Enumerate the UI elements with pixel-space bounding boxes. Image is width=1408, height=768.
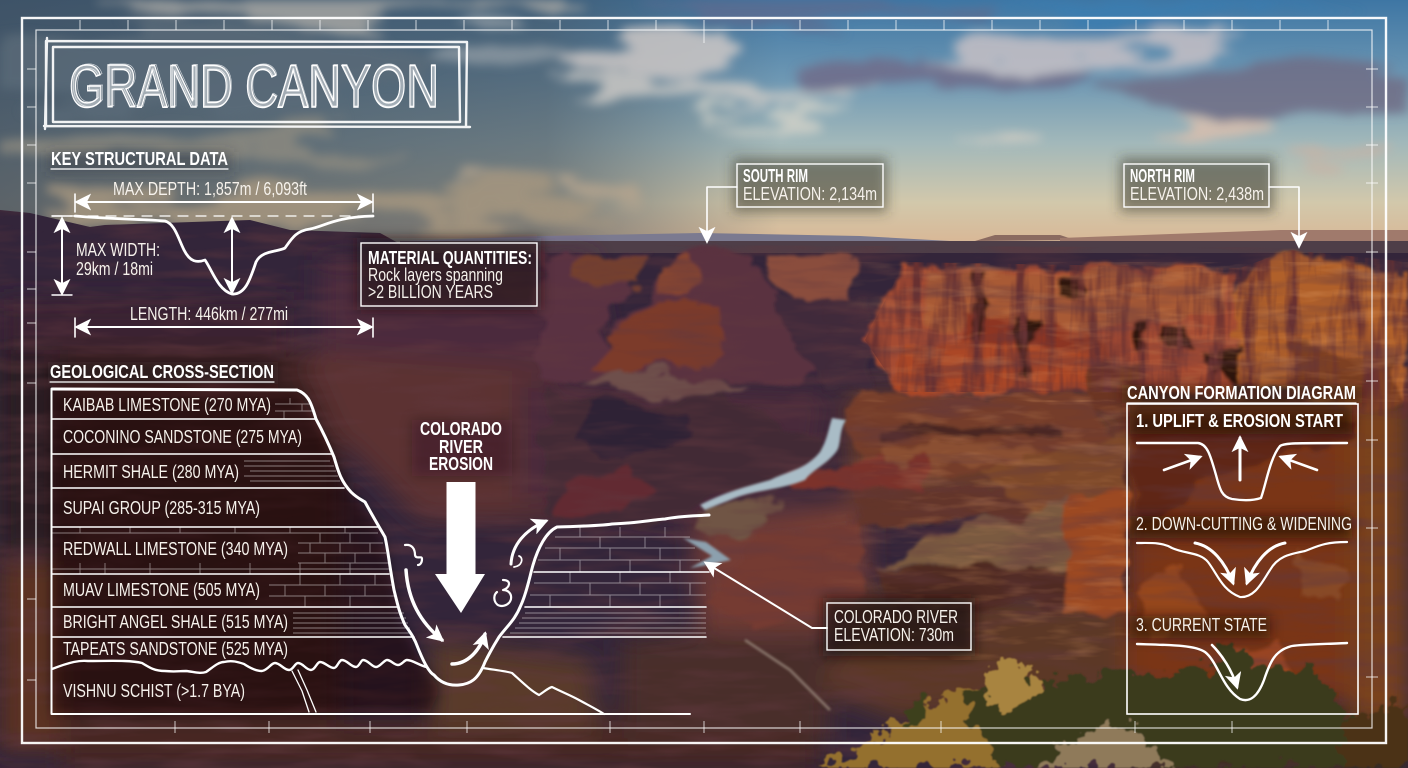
callout: material quantities: >2 BILLION YEARS (368, 282, 493, 302)
heading: geological cross-section: GEOLOGICAL CROSS-SECTION (50, 362, 274, 382)
stage 2: down-cutting and widening (1136, 514, 1352, 597)
strata labels: COCONINO SANDSTONE (275 MYA) (63, 427, 302, 447)
callout: south rim (707, 164, 883, 241)
strata labels: REDWALL LIMESTONE (340 MYA) (63, 539, 288, 559)
stage 1: uplift and erosion start (1136, 411, 1347, 500)
panel: geological cross-section (50, 362, 709, 714)
title sketch box (44, 38, 470, 129)
callout: colorado river elevation: ELEVATION: 730m (834, 625, 954, 645)
callout: north rim: NORTH RIM (1130, 166, 1195, 186)
title: Grand Canyon: GRAND CANYON (71, 52, 439, 119)
dark backing: halos behind labels and boxes (48, 152, 1362, 712)
strata outline and canyon profile (52, 389, 709, 714)
strata labels: VISHNU SCHIST (>1.7 BYA) (63, 681, 245, 701)
callout: colorado river elevation (706, 563, 971, 650)
strata labels: MUAV LIMESTONE (505 MYA) (63, 580, 260, 600)
arrows: erosion swirls (405, 521, 546, 664)
arrow: main downward erosion (435, 482, 485, 613)
callout: north rim: ELEVATION: 2,438m (1130, 184, 1264, 204)
callout: south rim: SOUTH RIM (743, 166, 808, 186)
panel: key structural data (51, 149, 373, 337)
label: colorado river erosion (420, 419, 502, 474)
canyon profile diagram with dimensions: MAX DEPTH: 1,857m / 6,093ft (113, 179, 307, 199)
stage 3: current state (1136, 615, 1347, 700)
label: colorado river erosion: EROSION (429, 454, 493, 474)
canyon profile diagram with dimensions (52, 179, 373, 337)
stage 2: down-cutting and widening: 2. DOWN-CUTTING & WIDENING (1136, 514, 1352, 534)
panel: canyon formation diagram (1127, 383, 1358, 714)
strata labels: SUPAI GROUP (285-315 MYA) (63, 498, 260, 518)
strata labels: TAPEATS SANDSTONE (525 MYA) (63, 639, 288, 659)
stage 1: uplift and erosion start: 1. UPLIFT & EROSION START (1136, 411, 1343, 431)
canyon profile diagram with dimensions: MAX WIDTH: (76, 240, 160, 260)
strata labels: KAIBAB LIMESTONE (270 MYA) (63, 395, 271, 415)
callout: material quantities (361, 243, 537, 306)
callout: material quantities: Rock layers spanning (368, 265, 503, 285)
callout: south rim: ELEVATION: 2,134m (743, 184, 877, 204)
canyon profile diagram with dimensions: 29km / 18mi (76, 259, 153, 279)
label: colorado river erosion: COLORADO (420, 419, 502, 439)
canyon profile diagram with dimensions: LENGTH: 446km / 277mi (130, 304, 288, 324)
panel box (1127, 404, 1358, 714)
title: Grand Canyon (44, 38, 470, 129)
rock texture hatching (52, 398, 706, 633)
callout: north rim (1124, 164, 1299, 246)
strata labels: HERMIT SHALE (280 MYA) (63, 462, 239, 482)
stage 3: current state: 3. CURRENT STATE (1136, 615, 1267, 635)
callout: colorado river elevation: COLORADO RIVER (834, 607, 958, 627)
strata labels (63, 395, 302, 701)
title: Grand Canyon: GRAND CANYON (69, 53, 439, 120)
label: colorado river erosion: RIVER (439, 437, 483, 457)
strata labels: BRIGHT ANGEL SHALE (515 MYA) (63, 612, 288, 632)
heading: key structural data: KEY STRUCTURAL DATA (51, 149, 228, 169)
callout: material quantities: MATERIAL QUANTITIES: (368, 248, 532, 268)
heading: canyon formation diagram: CANYON FORMATION DIAGRAM (1127, 383, 1356, 403)
